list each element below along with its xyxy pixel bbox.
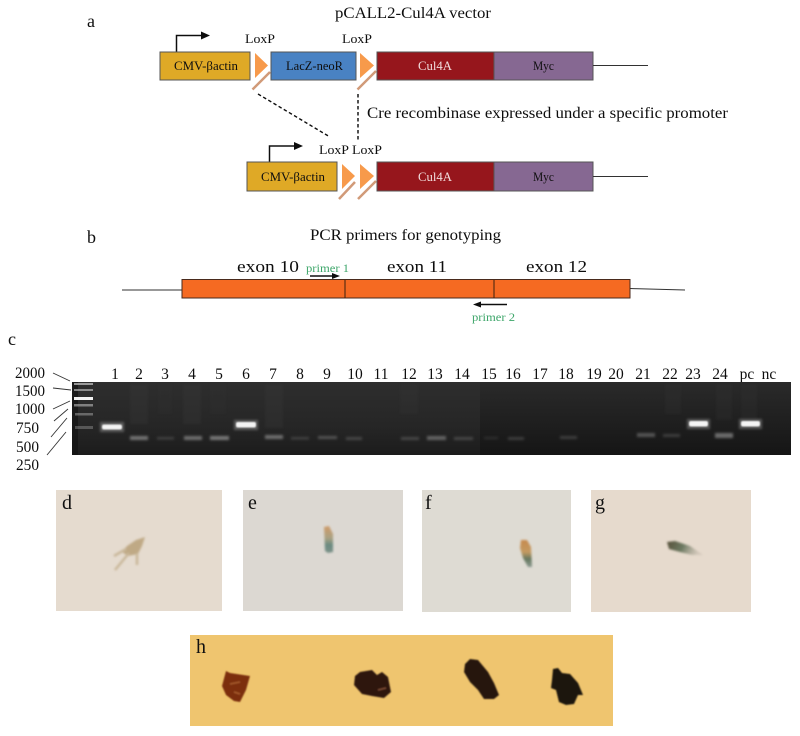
label f: f	[425, 492, 432, 514]
CMV-βactin box: CMV-βactin	[174, 59, 239, 73]
lane numbers: 24	[712, 366, 728, 383]
LoxP triangle 2	[358, 53, 376, 90]
ladder	[74, 383, 93, 429]
Cul4A box	[377, 52, 494, 80]
exon labels: exon 11	[387, 257, 447, 276]
lane numbers: 5	[215, 366, 223, 383]
lane numbers: 1	[111, 366, 119, 383]
CMV-βactin box	[160, 52, 250, 80]
dashed recombination lines	[258, 94, 358, 142]
size marker labels: 1000	[15, 401, 45, 418]
LoxP triangle 1	[252, 53, 270, 90]
lane numbers: 6	[242, 366, 250, 383]
weak bands	[130, 433, 733, 440]
photo g	[591, 490, 751, 612]
lane numbers	[111, 366, 776, 383]
photo e	[243, 490, 403, 611]
lane numbers: 9	[323, 366, 331, 383]
LoxP label 2: LoxP	[342, 31, 372, 46]
promoter arrow top	[176, 32, 210, 52]
CMV-βactin box lower	[247, 162, 337, 191]
lane numbers: 3	[161, 366, 169, 383]
Cre recombinase caption: Cre recombinase expressed under a specific promoter	[367, 105, 729, 122]
lane numbers: 23	[685, 366, 701, 383]
lane numbers: 4	[188, 366, 196, 383]
specimen e	[324, 526, 333, 553]
LoxP labels lower: LoxP	[352, 142, 382, 157]
panel b: PCR primers	[87, 227, 685, 324]
lane numbers: 21	[635, 366, 651, 383]
marker ticks	[47, 373, 71, 455]
CMV-βactin box lower: CMV-βactin	[261, 170, 326, 184]
lane numbers: 8	[296, 366, 304, 383]
LoxP labels lower	[319, 142, 382, 157]
lane numbers: 15	[481, 366, 497, 383]
promoter arrow bottom	[270, 142, 303, 162]
label h: h	[196, 636, 206, 658]
lower construct	[247, 142, 648, 199]
Myc box lower: Myc	[533, 170, 554, 184]
lane numbers: nc	[762, 366, 776, 383]
Cul4A box lower: Cul4A	[418, 170, 452, 184]
specimen d	[114, 537, 145, 570]
size marker labels: 2000	[15, 365, 45, 382]
exon bar	[182, 280, 630, 298]
panel a: vector diagram	[87, 5, 729, 199]
photo d	[56, 490, 222, 611]
specimen g	[667, 541, 703, 555]
sample 1	[222, 671, 250, 702]
lane numbers: 20	[608, 366, 624, 383]
primer 2: primer 2	[472, 312, 515, 324]
primer 1: primer 1	[306, 263, 349, 275]
Myc box: Myc	[533, 59, 554, 73]
size marker labels	[15, 365, 45, 474]
title: PCR primers: PCR primers for genotyping	[310, 227, 501, 244]
Myc box	[494, 52, 593, 80]
lane numbers: 7	[269, 366, 277, 383]
LacZ-neoR box	[271, 52, 356, 80]
size marker labels: 750	[16, 420, 39, 437]
lane numbers: 14	[454, 366, 470, 383]
label c: c	[8, 329, 16, 349]
label a: a	[87, 11, 95, 31]
lane smears	[130, 384, 757, 428]
photo h	[190, 635, 613, 726]
sample 3	[464, 659, 499, 699]
photo f	[422, 490, 571, 612]
label g: g	[595, 492, 605, 514]
panel c: agarose gel	[8, 329, 791, 474]
exon labels: exon 10	[237, 257, 299, 276]
lane numbers: 19	[586, 366, 602, 383]
title: pCALL2-Cul4A vector: pCALL2-Cul4A vector	[335, 5, 492, 22]
primer 1	[306, 263, 349, 279]
lane numbers: 16	[505, 366, 521, 383]
lane numbers: 10	[347, 366, 363, 383]
lane numbers: pc	[740, 366, 754, 383]
LoxP labels lower: LoxP	[319, 142, 349, 157]
sample 2	[354, 670, 391, 698]
primer 2	[472, 302, 515, 324]
label d: d	[62, 492, 72, 514]
label e: e	[248, 492, 257, 514]
size marker labels: 500	[16, 439, 39, 456]
label b: b	[87, 227, 96, 247]
LoxP label 1: LoxP	[245, 31, 275, 46]
lane numbers: 11	[374, 366, 388, 383]
exon labels: exon 12	[526, 257, 587, 276]
exon lines	[122, 288, 685, 290]
exon labels	[237, 257, 587, 276]
lane numbers: 22	[662, 366, 678, 383]
Myc box lower	[494, 162, 593, 191]
LacZ-neoR box: LacZ-neoR	[286, 59, 344, 73]
lane numbers: 17	[532, 366, 548, 383]
top construct	[160, 31, 648, 90]
vector line lower	[593, 176, 648, 178]
specimen f	[520, 540, 532, 567]
size marker labels: 1500	[15, 383, 45, 400]
Cul4A box lower	[377, 162, 494, 191]
gel image	[72, 382, 791, 455]
lane numbers: 12	[401, 366, 417, 383]
lane numbers: 13	[427, 366, 443, 383]
Cul4A box: Cul4A	[418, 59, 452, 73]
lane numbers: 18	[558, 366, 574, 383]
vector line	[593, 64, 648, 66]
strong bands	[102, 421, 760, 430]
size marker labels: 250	[16, 457, 39, 474]
sample 4	[551, 668, 583, 705]
LoxP triangles lower	[339, 164, 376, 199]
lane numbers: 2	[135, 366, 143, 383]
